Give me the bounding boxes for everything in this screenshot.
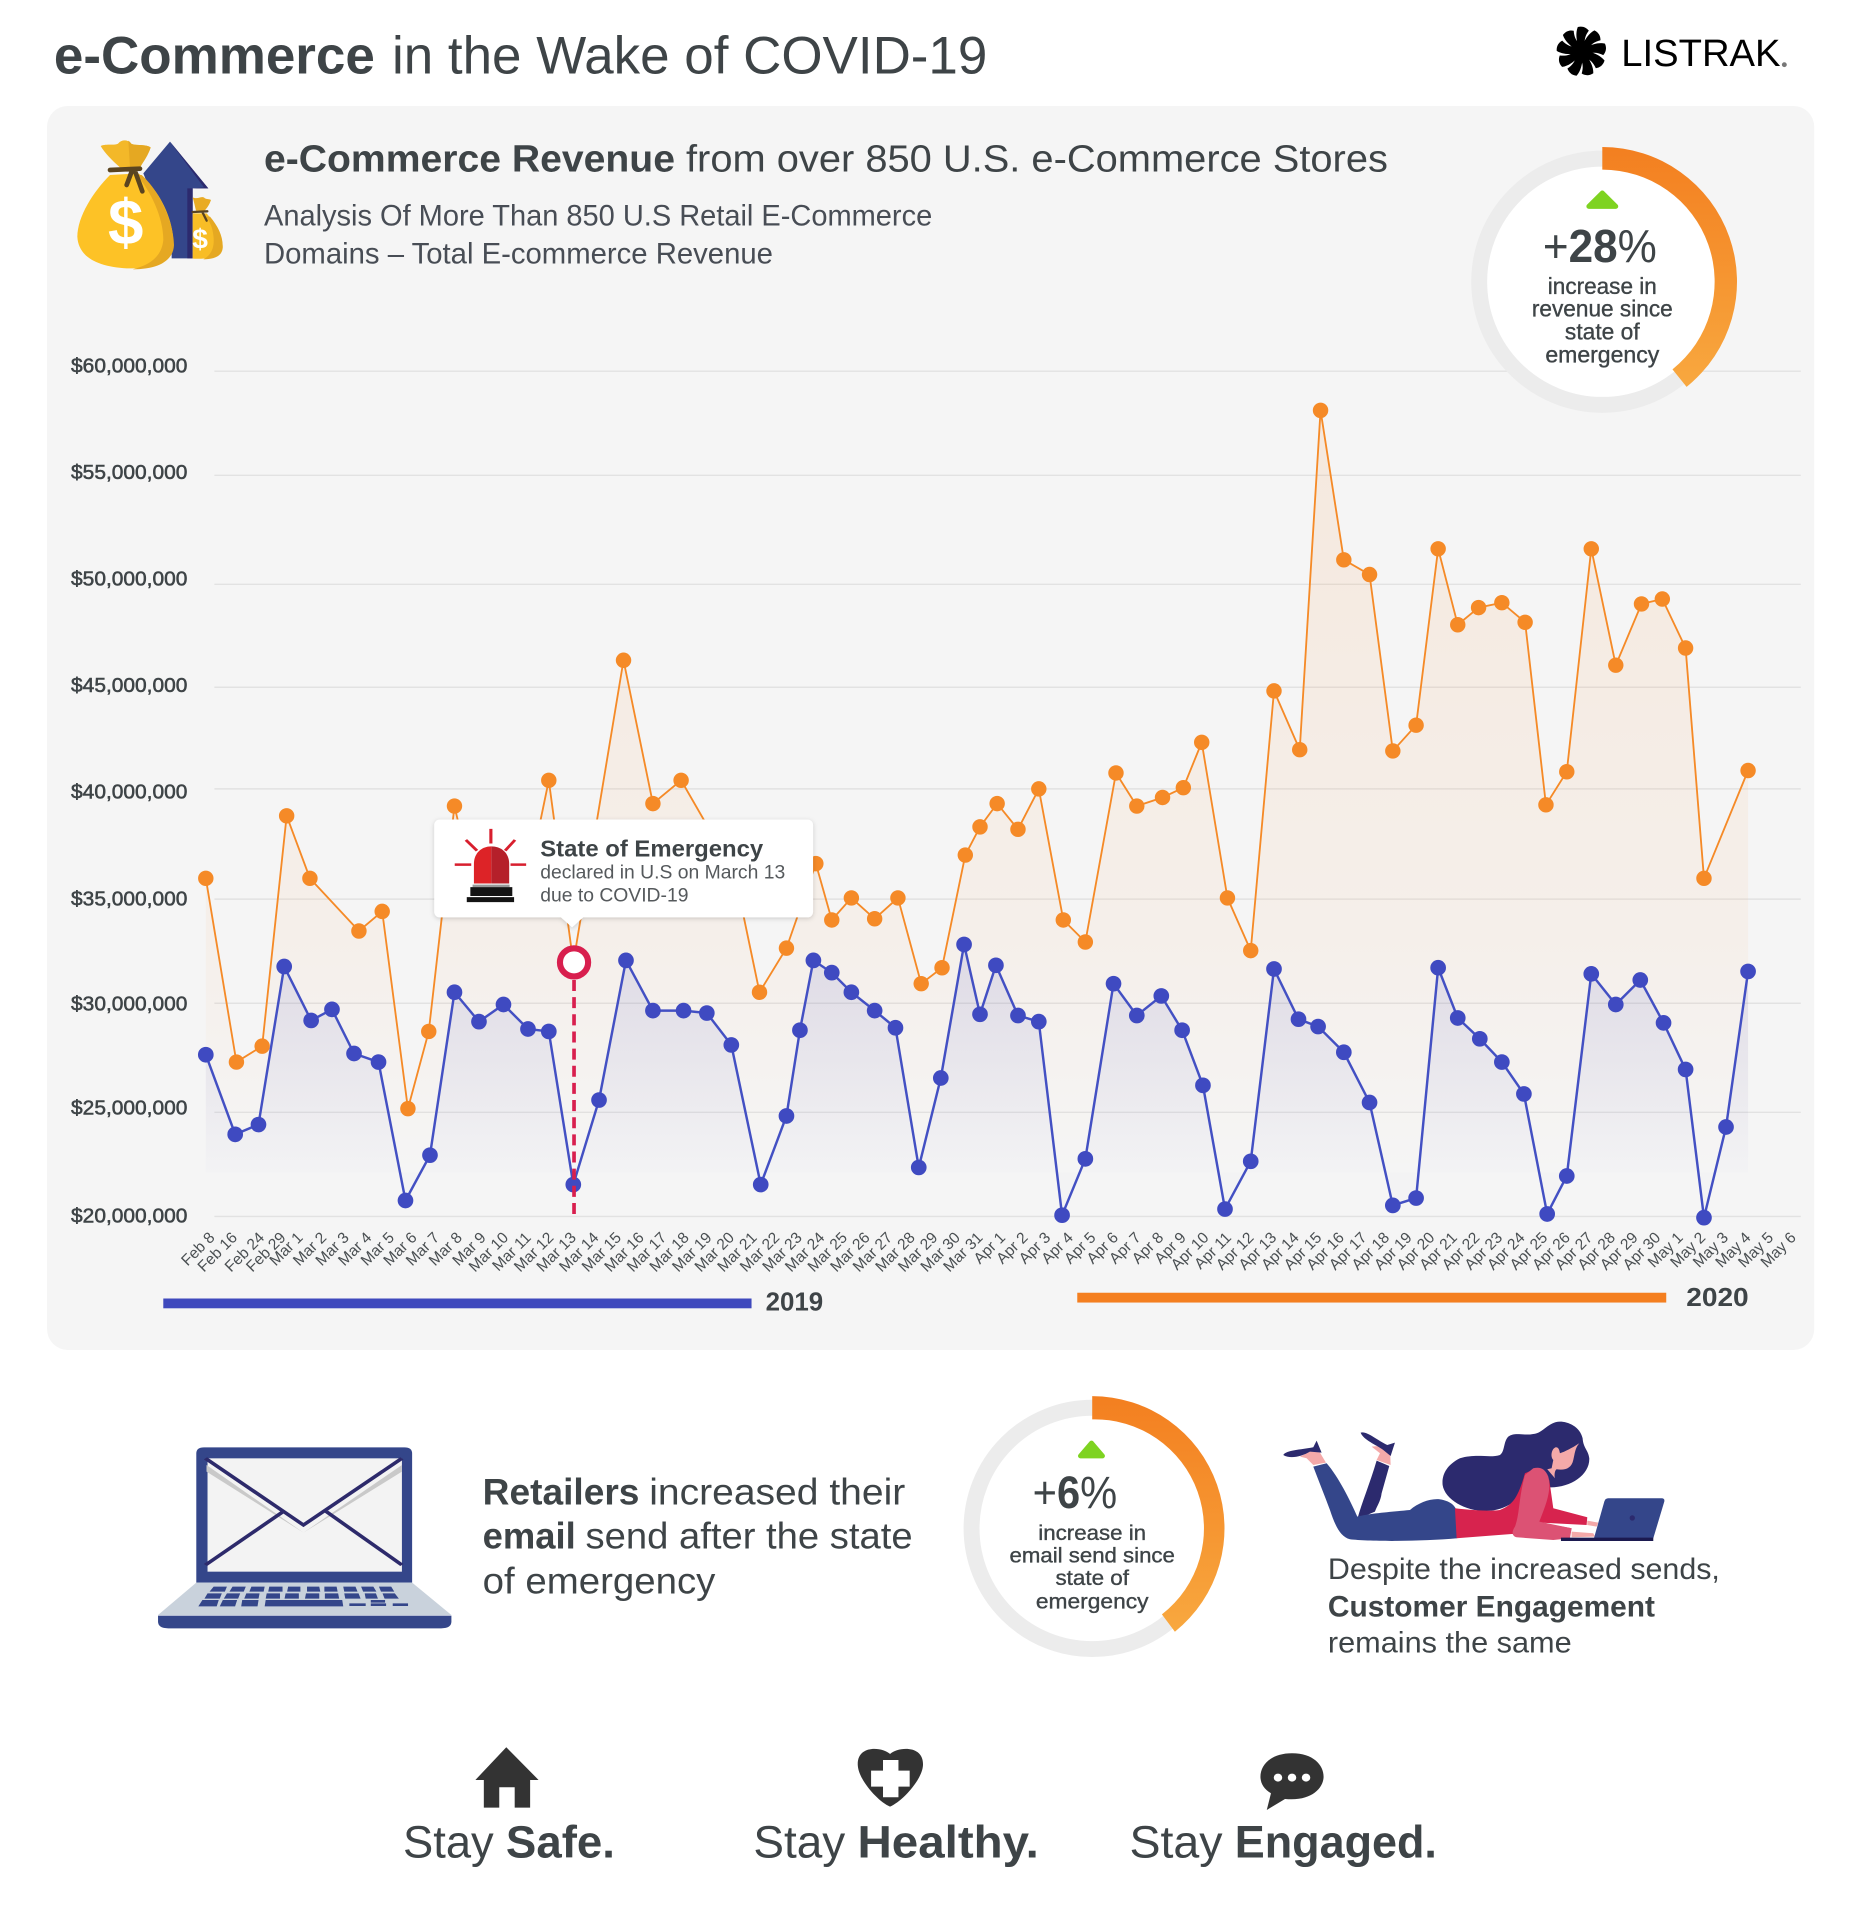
x axis labels: Mar 1 [267, 1229, 307, 1269]
y axis labels: $35,000,000 [71, 888, 187, 910]
x axis labels: Apr 10 [1168, 1229, 1213, 1274]
callout: state of emergency: State of Emergency [540, 835, 764, 861]
x axis labels: Mar 19 [669, 1229, 715, 1276]
icon: house [475, 1747, 539, 1808]
x axis labels: Apr 29 [1597, 1229, 1642, 1274]
text block: analysis description [264, 199, 932, 270]
icon: money bags with arrow [77, 140, 223, 269]
legend: 2020: 2020 [1686, 1284, 1749, 1312]
x axis labels: Apr 18 [1349, 1229, 1393, 1274]
x axis labels: Apr 17 [1326, 1229, 1370, 1274]
x axis labels: May 1 [1645, 1229, 1687, 1271]
text block: retailers email send: increased their [649, 1471, 905, 1512]
legend: 2019 [163, 1289, 823, 1317]
x axis labels: Mar 10 [466, 1229, 512, 1276]
text block: retailers email send [483, 1471, 913, 1602]
text block: customer engagement: remains the same [1328, 1627, 1572, 1660]
donut: +6% email send: increase in [1038, 1521, 1146, 1545]
x axis labels: Apr 24 [1484, 1229, 1529, 1274]
line: 2020 revenue [206, 410, 1748, 1109]
line chart: revenue 2019 vs 2020 [71, 355, 1801, 1276]
icon: speech bubble [1260, 1753, 1324, 1810]
x axis labels: Apr 6 [1084, 1229, 1122, 1268]
x axis labels: Mar 27 [850, 1229, 896, 1276]
x axis labels: Feb 8 [178, 1229, 218, 1269]
x axis labels: Mar 8 [426, 1229, 466, 1269]
heading: e-commerce revenue: e-Commerce Revenue [264, 138, 675, 180]
area: 2020 revenue [206, 410, 1748, 1172]
donut: +6% email send: email send since [1010, 1543, 1175, 1567]
text: stay safe: Safe. [506, 1817, 615, 1868]
x axis labels: May 4 [1712, 1229, 1755, 1271]
donut: +28% revenue: +28% [1543, 220, 1657, 272]
donut: +28% revenue [1479, 147, 1737, 405]
x axis labels [178, 1229, 1800, 1276]
x axis labels: Apr 28 [1575, 1229, 1619, 1274]
donut: +28% revenue: increase in [1548, 273, 1657, 299]
x axis labels: Mar 28 [872, 1229, 919, 1276]
x axis labels: Apr 20 [1394, 1229, 1439, 1274]
x axis labels: Mar 5 [358, 1229, 398, 1269]
x axis labels: Mar 7 [403, 1229, 443, 1269]
x axis labels: Mar 31 [940, 1229, 987, 1276]
logo: Listrak: LISTRAK [1621, 33, 1781, 75]
text: stay engaged: Stay [1129, 1817, 1223, 1868]
icon: green up triangle [1080, 1443, 1102, 1456]
x axis labels: Apr 16 [1303, 1229, 1348, 1274]
text: stay safe [403, 1817, 615, 1868]
x axis labels: Mar 20 [692, 1229, 738, 1276]
line: 2019 revenue [206, 944, 1748, 1218]
icon: money bags with arrow: $ [192, 223, 208, 255]
x axis labels: Apr 9 [1151, 1229, 1190, 1268]
x axis labels: Mar 16 [601, 1229, 648, 1276]
illustration: woman lying with laptop [1283, 1422, 1664, 1541]
x axis labels: Apr 12 [1213, 1229, 1257, 1274]
y axis labels: $20,000,000 [71, 1206, 187, 1228]
title [54, 26, 987, 85]
x axis labels: Mar 18 [647, 1229, 693, 1276]
text block: retailers email send: of emergency [483, 1561, 716, 1602]
icon: heart with cross [858, 1749, 923, 1807]
x axis labels: Apr 7 [1106, 1229, 1145, 1268]
marker: state of emergency date [560, 948, 588, 1216]
x axis labels: Feb 24 [222, 1229, 268, 1276]
x axis labels: Mar 14 [556, 1229, 603, 1276]
icon: money bags with arrow: $ [108, 187, 143, 258]
donut: +28% revenue: state of [1565, 318, 1640, 344]
text block: customer engagement: Despite the increased sends, [1328, 1553, 1720, 1586]
x axis labels: Mar 13 [534, 1229, 580, 1276]
y axis labels [71, 355, 187, 1228]
x axis labels: Mar 29 [895, 1229, 941, 1276]
y axis labels: $55,000,000 [71, 462, 187, 484]
x axis labels: May 5 [1735, 1229, 1777, 1271]
heading: e-commerce revenue [264, 138, 1388, 180]
y axis labels: $45,000,000 [71, 675, 187, 697]
x axis labels: Apr 5 [1061, 1229, 1099, 1268]
text: stay healthy: Stay [753, 1817, 846, 1868]
x axis labels: Mar 11 [489, 1229, 535, 1275]
y axis labels: $40,000,000 [71, 782, 187, 804]
y axis labels: $50,000,000 [71, 569, 187, 591]
x axis labels: Apr 2 [993, 1229, 1032, 1268]
x axis labels: Apr 4 [1038, 1229, 1077, 1268]
x axis labels: Mar 24 [782, 1229, 829, 1276]
donut: +6% email send: +6% [1033, 1467, 1117, 1518]
y axis labels: $30,000,000 [71, 994, 187, 1016]
logo: Listrak [1556, 27, 1787, 77]
x axis labels: Mar 12 [511, 1229, 557, 1276]
y axis labels: $60,000,000 [71, 355, 187, 377]
text block: retailers email send: send after the state [586, 1515, 913, 1556]
x axis labels: May 6 [1758, 1229, 1800, 1271]
icon: red alarm siren [455, 829, 526, 902]
text block: analysis description: Analysis Of More Than 850 U.S Retail E-Commerce [264, 199, 932, 232]
text: stay healthy [753, 1817, 1039, 1868]
y axis labels: $25,000,000 [71, 1098, 187, 1120]
x axis labels: Mar 9 [449, 1229, 490, 1269]
donut: +28% revenue: emergency [1545, 342, 1660, 368]
text block: retailers email send: email [483, 1515, 576, 1556]
title: e-Commerce [54, 26, 375, 85]
x axis labels: Apr 22 [1439, 1229, 1483, 1274]
x axis labels: Apr 11 [1191, 1229, 1235, 1273]
x axis labels: Apr 8 [1129, 1229, 1167, 1268]
legend: 2020 [1077, 1284, 1749, 1312]
x axis labels: Mar 2 [290, 1229, 330, 1269]
x axis labels: Apr 14 [1258, 1229, 1303, 1274]
x axis labels: Feb 16 [195, 1229, 241, 1276]
icon: laptop with envelope [158, 1447, 451, 1628]
donut: +6% email send: state of [1055, 1566, 1129, 1590]
x axis labels: Apr 30 [1620, 1229, 1664, 1274]
text: stay engaged [1129, 1817, 1437, 1868]
x axis labels: May 3 [1690, 1229, 1732, 1271]
x axis labels: Apr 19 [1371, 1229, 1416, 1274]
heading: e-commerce revenue: from over 850 U.S. e-Commerce Stores [686, 138, 1388, 180]
x axis labels: Mar 22 [737, 1229, 783, 1276]
legend: 2019: 2019 [766, 1289, 823, 1317]
donut: +28% revenue: revenue since [1532, 296, 1673, 322]
x axis labels: Mar 3 [313, 1229, 353, 1269]
callout: state of emergency: due to COVID-19 [540, 886, 688, 907]
x axis labels: Apr 26 [1529, 1229, 1574, 1274]
x axis labels: Apr 23 [1462, 1229, 1506, 1274]
callout: state of emergency: declared in U.S on March 13 [540, 862, 785, 883]
text: stay engaged: Engaged. [1235, 1817, 1437, 1868]
text block: customer engagement: Customer Engagement [1328, 1590, 1655, 1623]
donut: +6% email send: emergency [1036, 1589, 1149, 1613]
panel: e-commerce revenue [47, 106, 1814, 1350]
x axis labels: Apr 13 [1236, 1229, 1280, 1274]
text block: customer engagement [1328, 1553, 1720, 1660]
x axis labels: Apr 27 [1552, 1229, 1596, 1274]
x axis labels: May 2 [1667, 1229, 1709, 1271]
icon: green up triangle [1589, 193, 1616, 206]
x axis labels: Apr 3 [1016, 1229, 1054, 1268]
title: in the Wake of COVID-19 [392, 26, 987, 85]
area: 2019 revenue [206, 944, 1748, 1218]
x axis labels: Mar 21 [714, 1229, 761, 1276]
x axis labels: Mar 23 [759, 1229, 806, 1276]
x axis labels: Apr 15 [1281, 1229, 1325, 1274]
text: stay healthy: Healthy. [858, 1817, 1039, 1868]
x axis labels: Mar 15 [579, 1229, 625, 1276]
x axis labels: Feb 29 [243, 1229, 289, 1276]
donut: +6% email send [972, 1396, 1224, 1649]
x axis labels: Apr 21 [1416, 1229, 1461, 1274]
x axis labels: Mar 26 [827, 1229, 874, 1276]
text block: analysis description: Domains – Total E-commerce Revenue [264, 237, 773, 270]
x axis labels: Mar 17 [624, 1229, 670, 1276]
text block: retailers email send: Retailers [483, 1471, 639, 1512]
x axis labels: Mar 25 [805, 1229, 851, 1276]
x axis labels: Apr 25 [1507, 1229, 1551, 1274]
x axis labels: Apr 1 [971, 1229, 1009, 1268]
x axis labels: Mar 6 [380, 1229, 421, 1269]
x axis labels: Mar 4 [335, 1229, 376, 1269]
callout: state of emergency [434, 820, 813, 927]
text: stay safe: Stay [403, 1817, 494, 1868]
x axis labels: Mar 30 [918, 1229, 964, 1276]
